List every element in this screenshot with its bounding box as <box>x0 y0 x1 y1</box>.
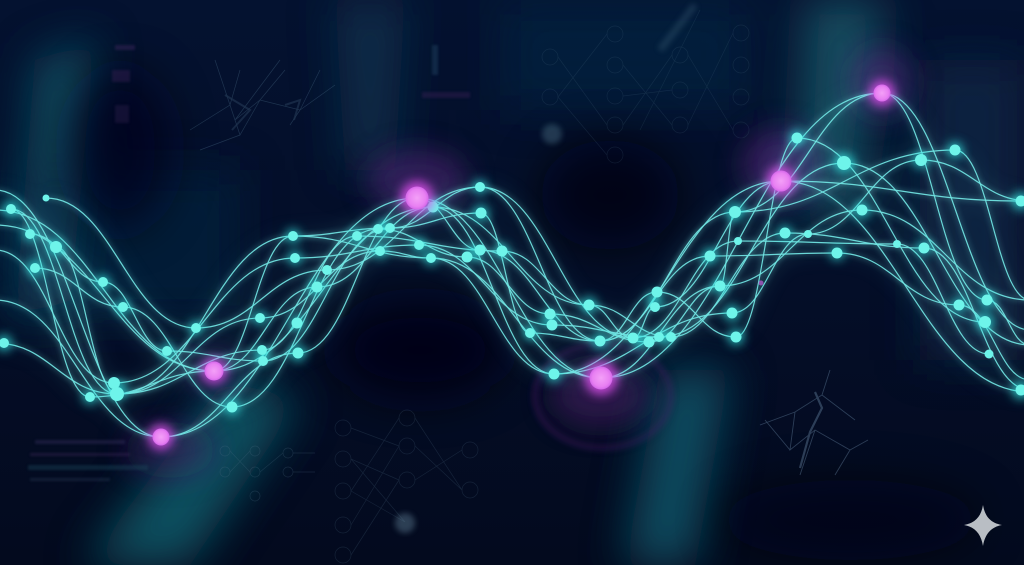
faint network: top centre <box>542 10 749 163</box>
faint bars: top <box>112 45 470 123</box>
faint cluster: top left <box>190 60 335 150</box>
faint cluster: bottom right <box>760 370 868 475</box>
faint mini network: lower left <box>220 446 315 501</box>
faint legend bars: left <box>28 440 148 481</box>
pink node glow <box>148 80 895 450</box>
blurred network node top <box>542 124 562 144</box>
strands <box>0 93 1024 437</box>
strand aura <box>0 93 1024 437</box>
small pink spark <box>758 280 764 286</box>
icon: watermark sparkle <box>964 505 1002 546</box>
ring under lower pink node <box>535 344 671 448</box>
faint streak: top <box>660 5 695 50</box>
faint network: bottom centre <box>335 410 478 563</box>
glow: magenta halos <box>125 48 912 478</box>
cyan nodes <box>0 132 1024 412</box>
strand glow <box>0 93 1024 437</box>
blurred network node <box>395 513 415 533</box>
cyan node glow <box>0 130 1024 415</box>
pink nodes <box>152 84 890 446</box>
